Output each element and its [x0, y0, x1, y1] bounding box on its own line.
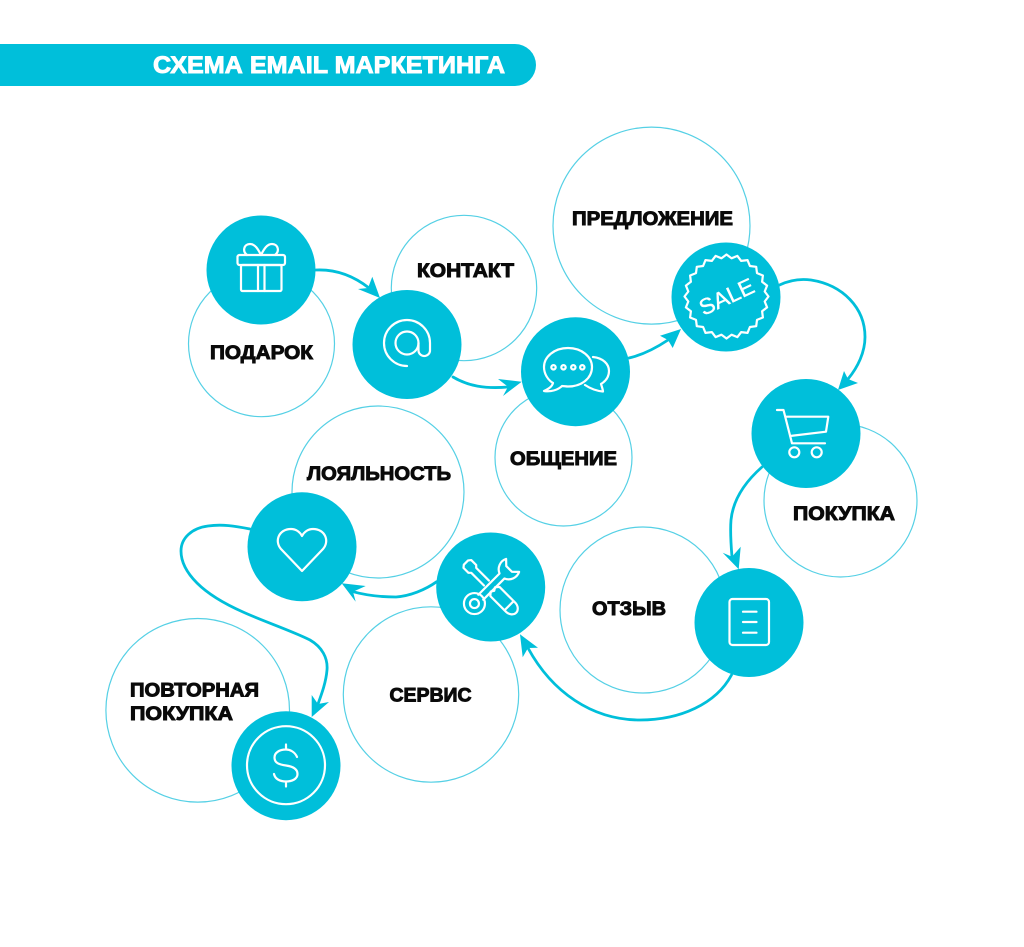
arrow: предложение to покупка [780, 279, 865, 390]
label: контакт: КОНТАКТ [417, 260, 514, 282]
label: лояльность: ЛОЯЛЬНОСТЬ [307, 463, 451, 485]
label: подарок: ПОДАРОК [210, 342, 313, 364]
badge: cart icon [752, 379, 860, 488]
label: повторная покупка: ПОВТОРНАЯ [130, 680, 259, 702]
badge: chat icon [521, 317, 630, 426]
step: покупка [752, 379, 917, 577]
label: предложение: ПРЕДЛОЖЕНИЕ [572, 208, 733, 230]
label: сервис: СЕРВИС [390, 685, 472, 707]
step: предложение [553, 127, 780, 352]
step: подарок [188, 216, 334, 417]
badge: document icon [694, 568, 804, 677]
arrow: лояльность to повторная покупка [181, 525, 329, 717]
badge: heart icon [248, 492, 356, 601]
arrow: сервис to лояльность [342, 582, 437, 602]
step: общение [495, 317, 632, 526]
step: лояльность [248, 406, 464, 601]
badge: dollar icon [232, 711, 340, 820]
arrow: отзыв to сервис [520, 634, 732, 720]
arrow: общение to предложение [629, 329, 681, 358]
badge: sale icon [672, 242, 780, 352]
badge: gift icon [206, 216, 316, 324]
title banner: СХЕМА EMAIL МАРКЕТИНГА [153, 52, 505, 79]
label: отзыв: ОТЗЫВ [592, 598, 666, 620]
step: повторная покупка [106, 618, 340, 820]
step: сервис [343, 532, 545, 782]
badge: tools icon [436, 532, 545, 642]
title banner [0, 44, 536, 86]
label: общение: ОБЩЕНИЕ [510, 448, 617, 470]
arrow: подарок to контакт [316, 270, 380, 298]
badge: sale icon: SALE [695, 273, 758, 321]
label: повторная покупка [130, 680, 259, 725]
step: контакт [352, 215, 537, 399]
step: отзыв [560, 527, 804, 693]
label: покупка: ПОКУПКА [793, 503, 895, 525]
badge: at icon [352, 290, 462, 399]
label: повторная покупка: ПОКУПКА [130, 703, 233, 725]
arrow: контакт to общение [453, 377, 522, 396]
arrow: покупка to отзыв [723, 467, 762, 569]
